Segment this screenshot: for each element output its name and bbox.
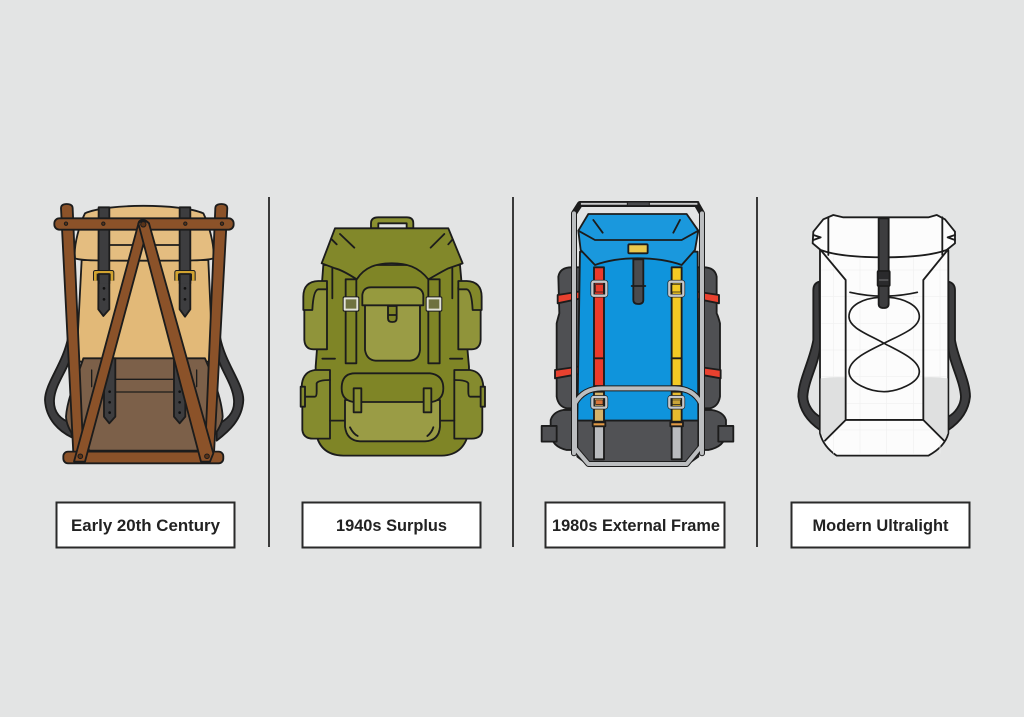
icon: side compression straps bbox=[555, 291, 721, 378]
label: Modern Ultralight bbox=[792, 502, 970, 548]
icon: canvas body bbox=[77, 260, 213, 362]
icon: center strap bbox=[632, 259, 645, 304]
icon: lower side pockets bbox=[302, 370, 330, 439]
icon: body bbox=[820, 250, 948, 456]
icon: buckles bbox=[343, 297, 442, 311]
icon: vertical straps bbox=[346, 279, 440, 363]
icon: center strap and buckle bbox=[879, 218, 889, 308]
icon: grey base bbox=[577, 421, 698, 465]
icon: roll top bbox=[813, 215, 955, 257]
label: 1940s Surplus: 1940s Surplus bbox=[336, 516, 447, 535]
icon: upper straps bbox=[98, 207, 190, 317]
label: Modern Ultralight: Modern Ultralight bbox=[812, 516, 949, 535]
icon: blue main body bbox=[577, 252, 698, 421]
icon: red strap bbox=[594, 267, 604, 386]
panel: 1940s surplus backpack bbox=[301, 217, 485, 456]
icon: shoulder straps bbox=[45, 337, 243, 441]
icon: grey side panels bbox=[821, 377, 846, 441]
icon: brass buckles bbox=[95, 272, 193, 281]
icon: lid tag bbox=[628, 244, 648, 253]
panel: modern ultralight backpack bbox=[798, 215, 970, 456]
icon: top lid bbox=[322, 228, 463, 279]
label: 1980s External Frame: 1980s External Frame bbox=[552, 516, 720, 535]
panel: 1980s external frame backpack bbox=[542, 202, 733, 465]
icon: strap buckles bbox=[592, 282, 683, 408]
icon: side pockets and hip belt bbox=[542, 267, 733, 450]
icon: lower pocket bbox=[66, 358, 223, 451]
label: 1940s Surplus bbox=[302, 502, 480, 548]
label: Early 20th Century bbox=[56, 502, 234, 548]
icon: lower straps bbox=[104, 358, 185, 423]
icon: frame top bar bbox=[580, 202, 698, 206]
icon: lower straps bbox=[594, 392, 604, 422]
icon: frame rivets bbox=[64, 222, 224, 459]
icon: front pocket bbox=[365, 300, 420, 361]
icon: blue lid bbox=[578, 214, 698, 265]
icon: handle bbox=[371, 217, 413, 228]
label: 1980s External Frame bbox=[546, 502, 724, 548]
icon: body seams bbox=[821, 250, 948, 441]
icon: top lid bbox=[75, 206, 214, 261]
icon: shoulder straps bbox=[798, 282, 970, 430]
label: Early 20th Century: Early 20th Century bbox=[71, 516, 221, 535]
icon: upper side pockets bbox=[304, 287, 327, 349]
icon: yellow strap bbox=[672, 267, 682, 386]
panel: early 20th century backpack bbox=[45, 204, 243, 463]
icon: bungee cord bbox=[849, 292, 919, 392]
icon: aluminium frame bbox=[574, 204, 702, 464]
icon: lower front pocket bbox=[345, 400, 440, 441]
icon: wooden frame bbox=[54, 204, 234, 463]
icon: main body bbox=[316, 265, 469, 456]
